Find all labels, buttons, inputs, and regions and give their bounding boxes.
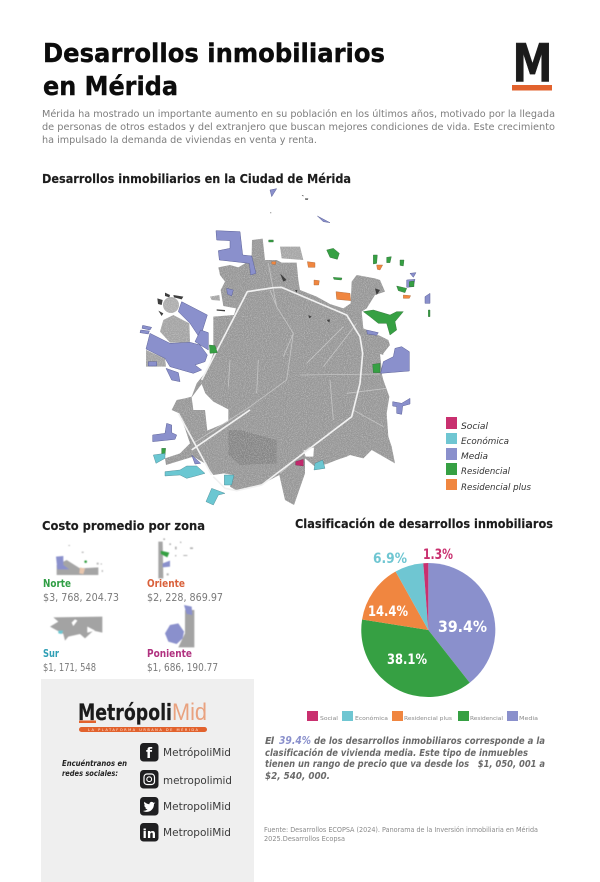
- title: Desarrollos inmobiliarios: [43, 39, 385, 69]
- callout: media share: 39.4%: [279, 734, 311, 747]
- intro text: de personas de otros estados y del extranjero que buscan mejores condiciones de vida. Este crecimiento: [42, 122, 555, 133]
- road network: [193, 263, 387, 473]
- map legend: Económica: [461, 436, 509, 447]
- zone: Sur: Sur: [43, 648, 60, 660]
- slice: residencial plus 14.4%: [362, 572, 428, 630]
- developments: económica: [153, 453, 325, 505]
- zone: Poniente: $1, 686, 190.77: [147, 662, 218, 674]
- zone: Oriente: [147, 538, 223, 604]
- source note: Fuente: Desarrollos ECOPSA (2024). Panorama de la Inversión inmobiliaria en Mérida: [264, 826, 538, 834]
- zone: Sur: $1, 171, 548: [43, 662, 96, 674]
- pie chart: [361, 547, 495, 697]
- pie values: 1.3%: [423, 547, 453, 563]
- zone: Oriente: Oriente: [147, 578, 185, 590]
- callout: media share: $2, 540, 000.: [265, 771, 330, 782]
- pie legend: Económica: [355, 715, 388, 722]
- pie legend: Social: [320, 716, 339, 722]
- logo: MetrópoliMid: Metrópoli: [78, 701, 172, 726]
- social: linkedin: in: [142, 826, 156, 841]
- social: facebook: [140, 743, 231, 762]
- developments: residencial: [162, 240, 430, 455]
- intro text: [42, 108, 555, 146]
- heading: map: Desarrollos inmobiliarios en la Ciudad de Mérida: [42, 171, 351, 186]
- map legend: Media: [461, 452, 488, 462]
- social: instagram: [140, 770, 232, 788]
- slice: social 1.3%: [423, 563, 428, 630]
- zone: Poniente: Poniente: [147, 648, 192, 660]
- pie legend: Media: [519, 716, 538, 722]
- slice: residencial 38.1%: [361, 620, 470, 697]
- map of Mérida developments: [140, 189, 430, 505]
- developments: residencial plus: [272, 262, 411, 301]
- slice: media 39.4%: [428, 563, 495, 683]
- pie legend: Residencial plus: [404, 716, 452, 722]
- zone: Sur: [43, 617, 102, 674]
- intro text: Mérida ha mostrado un importante aumento en su población en los últimos años, motivado por la llegada: [42, 108, 555, 120]
- title: en Mérida: [43, 72, 178, 102]
- heading: classification: Clasificación de desarrollos inmobiliaros: [295, 516, 553, 531]
- social: twitter: [140, 797, 231, 816]
- ring road: [178, 287, 363, 491]
- social: twitter: MetropoliMid: [163, 801, 231, 813]
- source note: [264, 826, 538, 843]
- social: facebook: MetrópoliMid: [163, 747, 231, 759]
- city urban area: [146, 239, 395, 505]
- scattered dark developments: [157, 195, 380, 323]
- zone: Oriente: $2, 228, 869.97: [147, 592, 223, 604]
- zone: Norte: [43, 545, 119, 604]
- social: linkedin: MetropoliMid: [163, 827, 231, 839]
- text: find us on social networks: redes sociales:: [62, 769, 118, 778]
- pie values: 38.1%: [387, 652, 427, 668]
- map legend: Residencial plus: [461, 483, 531, 493]
- pie values: [368, 547, 487, 668]
- developments: media: [140, 189, 430, 464]
- callout: media share: tienen un rango de precio que va desde los $1, 050, 001 a: [265, 759, 545, 770]
- source note: 2025.Desarrollos Ecopsa: [264, 835, 345, 843]
- text: find us on social networks: Encuéntranos en: [62, 758, 127, 768]
- zone: Norte: $3, 768, 204.73: [43, 592, 119, 604]
- logo: M mark: M: [512, 34, 552, 94]
- map legend: Social: [461, 422, 489, 432]
- map legend: [446, 417, 531, 493]
- map legend: Residencial: [461, 467, 510, 477]
- pie values: 6.9%: [373, 551, 407, 567]
- pie values: 14.4%: [368, 604, 408, 620]
- pie legend: [307, 711, 538, 722]
- callout: media share: [265, 734, 545, 782]
- logo: MetrópoliMid: LA PLATAFORMA URBANA DE MÉRIDA: [88, 727, 199, 732]
- text: find us on social networks: [62, 758, 127, 778]
- title: [43, 39, 385, 102]
- heading: cost by zone: Costo promedio por zona: [42, 518, 205, 533]
- callout: media share: El: [265, 736, 275, 747]
- zone: Poniente: [147, 605, 218, 674]
- intro text: ha impulsado la demanda de viviendas en venta y renta.: [42, 135, 317, 146]
- callout: media share: de los desarrollos inmobiliaros corresponde a la: [314, 736, 545, 747]
- development: social: [296, 459, 303, 466]
- pie legend: Residencial: [470, 716, 503, 722]
- zone: Norte: Norte: [43, 578, 71, 590]
- social: instagram: metropolimid: [163, 775, 232, 787]
- pie values: 39.4%: [438, 617, 487, 636]
- logo: MetrópoliMid: Mid: [172, 699, 207, 726]
- slice: económica 6.9%: [396, 563, 428, 630]
- callout: media share: clasificación de vivienda media. Este tipo de inmuebles: [265, 748, 528, 759]
- social: facebook: f: [146, 746, 153, 762]
- social: linkedin: [140, 823, 231, 842]
- panel: social and brand: [41, 679, 254, 882]
